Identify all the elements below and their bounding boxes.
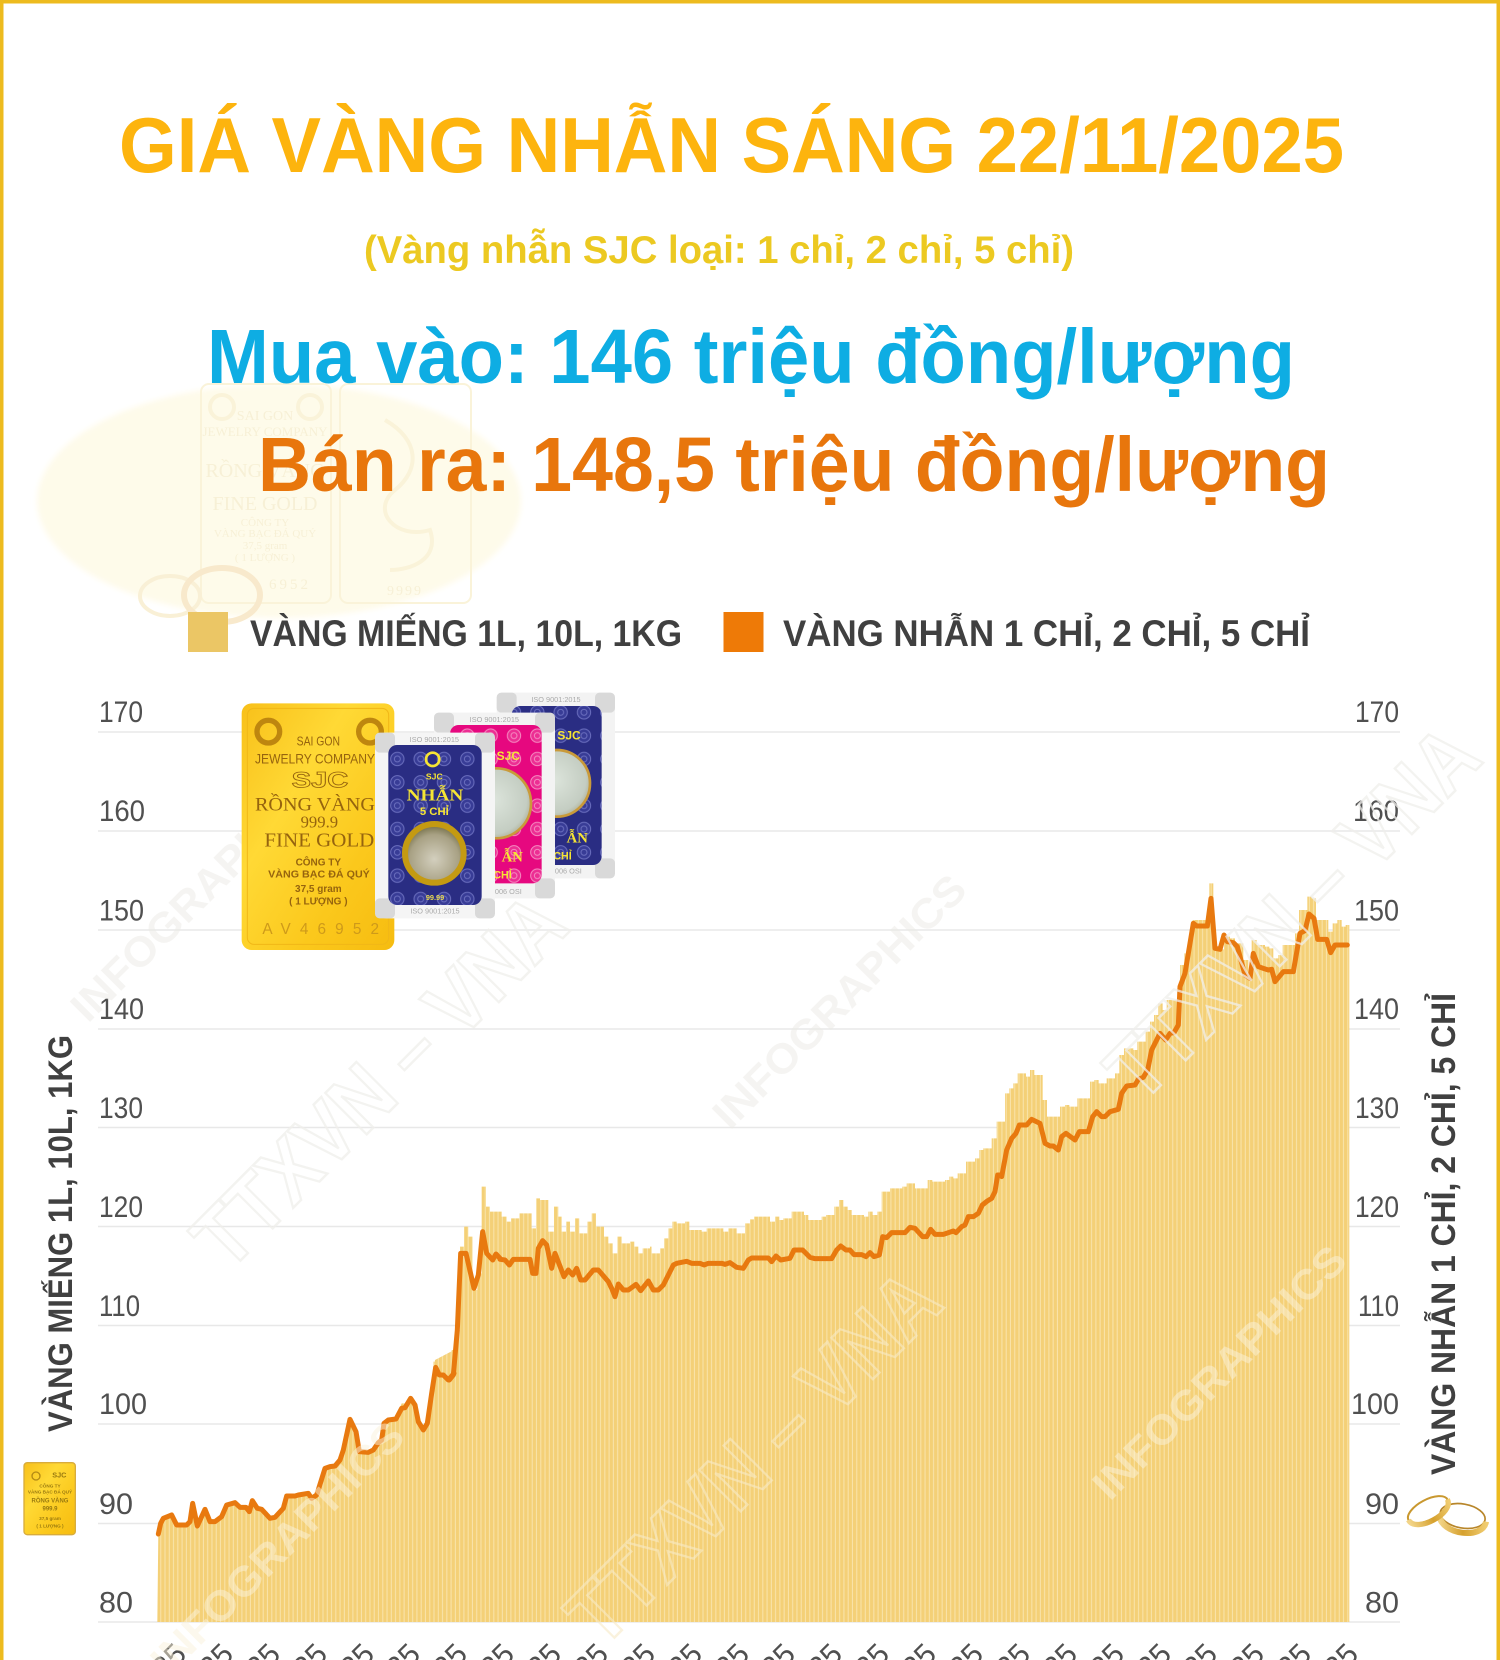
faded gold bars photo behind prices: ( 1 LƯỢNG ) <box>235 552 295 564</box>
ring card: front navy: 99.99 <box>426 893 444 902</box>
sell price: Bán ra: 148,5 triệu đồng/lượng <box>258 422 1330 508</box>
ring card: front navy: ISO 9001:2015 <box>410 735 459 744</box>
left axis values: 100 <box>99 1388 147 1421</box>
watermark: TTXVN - VNA left: TTXVN – VNA <box>174 876 585 1286</box>
right axis values: 130 <box>1355 1092 1399 1125</box>
faded gold bars photo behind prices: CÔNG TY <box>241 517 289 529</box>
ring card: front navy: NHẪN <box>407 786 464 805</box>
watermark: INFOGRAPHICS left: INFOGRAPHICS <box>61 758 333 1030</box>
ring card: middle pink: CHỈ <box>493 868 512 881</box>
left ring <box>1404 1491 1453 1530</box>
title: GIÁ VÀNG NHẪN SÁNG 22/11/2025 <box>119 101 1344 189</box>
gold bar <box>242 703 394 950</box>
buy price: Mua vào: 146 triệu đồng/lượng <box>207 314 1295 400</box>
ring card: front navy: 5 CHỈ <box>420 805 449 818</box>
ring card: front navy: ISO 9001:2015 <box>410 906 460 915</box>
right axis values: 170 <box>1355 696 1399 729</box>
right ring <box>1438 1500 1487 1533</box>
left axis title: VÀNG MIẾNG 1L, 10L, 1KG <box>42 1035 80 1432</box>
ring card: middle pink: ẪN <box>502 848 523 866</box>
ring card: back navy: CHỈ <box>553 849 572 862</box>
icon: small gold bar: CÔNG TY <box>39 1482 61 1489</box>
faded gold bars photo behind prices: JEWELRY COMPANY <box>202 424 328 439</box>
grid lines <box>98 732 1400 1622</box>
watermark: INFOGRAPHICS right: INFOGRAPHICS <box>1083 1236 1355 1508</box>
ring card: middle pink: ISO 9001:2015 <box>470 715 519 724</box>
ring card: back navy: 006 OSI <box>555 866 582 875</box>
ring card: back navy: ISO 9001:2015 <box>531 695 581 704</box>
line: gold ring price <box>158 898 1347 1534</box>
icon: gold rings <box>1404 1491 1487 1533</box>
x axis date labels <box>118 1638 1365 1660</box>
faded gold bars photo behind prices: FINE GOLD <box>212 493 318 515</box>
icon: small gold bar: ( 1 LƯỢNG ) <box>36 1523 64 1528</box>
gold bar: 37,5 gram <box>295 884 342 895</box>
ring card: middle pink: 006 OSI <box>495 887 522 896</box>
faded gold bars photo behind prices: SAI GON <box>237 409 293 424</box>
legend swatch: rings <box>724 612 764 652</box>
right axis values: 110 <box>1358 1290 1399 1323</box>
faded gold bars photo behind prices: 37,5 gram <box>243 540 288 552</box>
right axis values: 140 <box>1354 993 1399 1026</box>
left axis values: 160 <box>99 795 145 828</box>
ring card: back navy <box>497 693 615 878</box>
subtitle: (Vàng nhẫn SJC loại: 1 chỉ, 2 chỉ, 5 chỉ) <box>364 228 1074 272</box>
left axis values: 90 <box>99 1488 133 1521</box>
legend swatch: gold bars <box>188 612 228 652</box>
gold bar: ( 1 LƯỢNG ) <box>289 897 348 908</box>
legend label: gold bars: VÀNG MIẾNG 1L, 10L, 1KG <box>250 613 682 654</box>
right axis values: 80 <box>1365 1586 1399 1620</box>
chart <box>98 696 1400 1660</box>
legend label: rings: VÀNG NHẪN 1 CHỈ, 2 CHỈ, 5 CHỈ <box>783 612 1310 654</box>
ring card: front navy <box>375 733 495 918</box>
faded gold bars photo behind prices: 6952 <box>269 577 311 593</box>
gold bar: JEWELRY COMPANY <box>255 750 376 766</box>
gold bar: 999.9 <box>301 812 338 831</box>
legend <box>188 612 1310 654</box>
faded gold bars photo behind prices: RỒNG VÀNG <box>205 458 325 482</box>
right axis title: VÀNG NHẪN 1 CHỈ, 2 CHỈ, 5 CHỈ <box>1425 993 1463 1475</box>
faded gold bars photo behind prices <box>37 384 521 622</box>
icon: small gold bar: VÀNG BẠC ĐÁ QUÝ <box>28 1488 73 1494</box>
icon: small gold bar <box>24 1463 75 1535</box>
gold bar: RỒNG VÀNG <box>255 794 375 816</box>
ring card: back navy: SJC <box>557 728 581 742</box>
left axis values: 120 <box>99 1191 143 1224</box>
icon: small gold bar: 999.9 <box>43 1507 58 1513</box>
gold bar: FINE GOLD <box>264 830 374 852</box>
gold bar: SAI GON <box>297 733 340 748</box>
right axis values: 120 <box>1355 1191 1399 1224</box>
gold bar: SJC <box>292 767 348 792</box>
icon: small gold bar: 37,5 gram <box>39 1516 61 1521</box>
left axis values: 80 <box>99 1586 133 1620</box>
right axis values: 150 <box>1354 894 1399 928</box>
right axis values: 100 <box>1351 1388 1399 1421</box>
watermark: INFOGRAPHICS center: INFOGRAPHICS <box>703 865 975 1137</box>
ring card: middle pink <box>434 713 555 898</box>
ring card: middle pink: SJC <box>497 749 520 763</box>
icon: small gold bar: SJC <box>52 1470 67 1479</box>
left axis values: 110 <box>99 1290 140 1323</box>
faded gold bars photo behind prices: VÀNG BẠC ĐÁ QUÝ <box>214 528 316 540</box>
faded gold bars photo behind prices: 9999 <box>387 584 423 599</box>
ring card: back navy: ẪN <box>567 829 588 847</box>
right axis values: 160 <box>1353 795 1399 828</box>
left axis values <box>99 696 147 1620</box>
left axis values: 150 <box>99 894 144 928</box>
gold bar: VÀNG BẠC ĐÁ QUÝ <box>268 867 370 880</box>
gold bar: CÔNG TY <box>296 855 341 868</box>
icon: small gold bar: RỒNG VÀNG <box>32 1497 69 1504</box>
product image: SJC gold bar and ring cards <box>242 693 615 950</box>
right axis values: 90 <box>1365 1488 1399 1521</box>
left axis values: 170 <box>99 696 143 729</box>
watermarks <box>61 708 1498 1660</box>
gold bar: AV46952 <box>262 921 379 938</box>
left axis values: 140 <box>99 993 144 1026</box>
right axis values <box>1351 696 1399 1620</box>
ring card: front navy: SJC <box>426 771 443 781</box>
watermark: TTXVN - VNA center: TTXVN – VNA <box>548 1253 959 1660</box>
left axis values: 130 <box>99 1092 143 1125</box>
bars: gold bar price <box>157 860 1350 1622</box>
